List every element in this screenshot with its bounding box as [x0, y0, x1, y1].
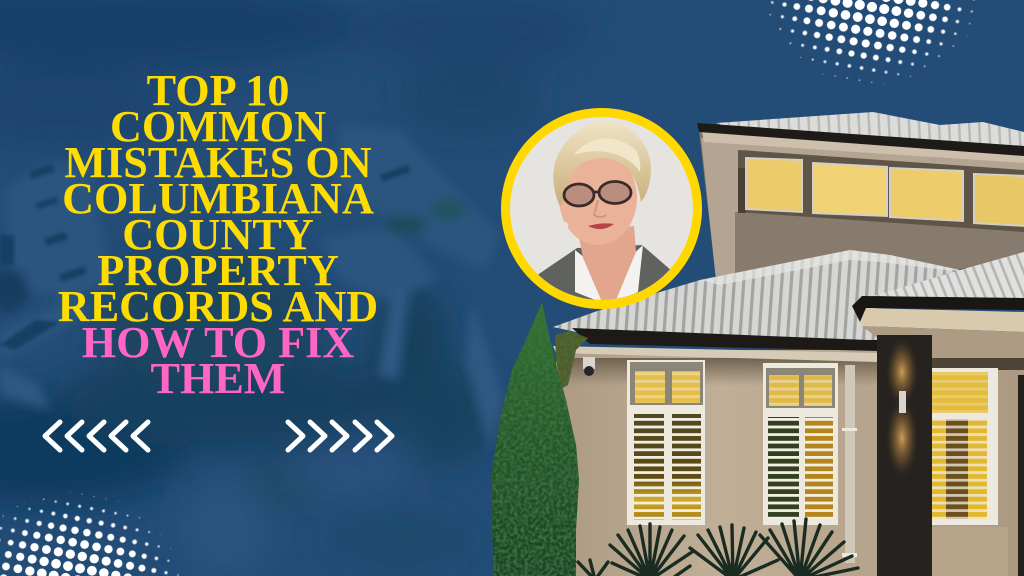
face [559, 151, 637, 245]
lower panel [969, 527, 1008, 576]
upper storey [697, 112, 1024, 280]
right wall column [1008, 370, 1024, 576]
halftone dots: top right [760, 0, 986, 86]
halftone dots: bottom left [0, 489, 181, 576]
title: COMMON [110, 102, 326, 151]
icon: left chevrons [45, 422, 148, 450]
lower wall [556, 350, 1024, 576]
soffit band [553, 346, 877, 362]
right fascia [852, 296, 1024, 322]
icon: right chevrons [288, 422, 392, 450]
background: blurred aerial photo with navy overlay [0, 0, 547, 556]
title: RECORDS AND [58, 282, 378, 331]
jacket [538, 245, 670, 300]
cypress tree [492, 302, 579, 576]
window C [932, 368, 998, 525]
soffit shade [569, 358, 877, 383]
title: TOP 10 [147, 66, 289, 115]
dark pillar [877, 335, 932, 576]
neck [578, 226, 636, 302]
security camera [583, 357, 595, 376]
upper windows [746, 158, 1024, 226]
title: COUNTY [122, 210, 314, 259]
earrings [564, 222, 568, 228]
upper roof [716, 112, 1024, 146]
agave plants [578, 519, 858, 576]
title: MISTAKES ON [64, 138, 372, 187]
title: PROPERTY [97, 246, 339, 295]
title [58, 66, 378, 403]
upper fascia [697, 123, 1024, 156]
title: COLUMBIANA [62, 174, 374, 223]
title: THEM [150, 354, 286, 403]
nose [594, 200, 606, 217]
main roof [553, 250, 960, 342]
downpipe [842, 365, 857, 563]
wall lamp [888, 342, 916, 472]
portrait with yellow ring [501, 108, 702, 320]
hair [553, 122, 651, 206]
title: HOW TO FIX [82, 318, 354, 367]
ivy [555, 331, 588, 388]
window A [627, 360, 705, 525]
right soffit and wall [860, 308, 1024, 332]
window B [763, 363, 838, 525]
mouth [588, 223, 614, 229]
right roof [873, 252, 1024, 300]
main roof fascia [572, 328, 878, 351]
photo: house [492, 112, 1024, 576]
shirt [575, 245, 643, 304]
glasses [564, 182, 631, 206]
